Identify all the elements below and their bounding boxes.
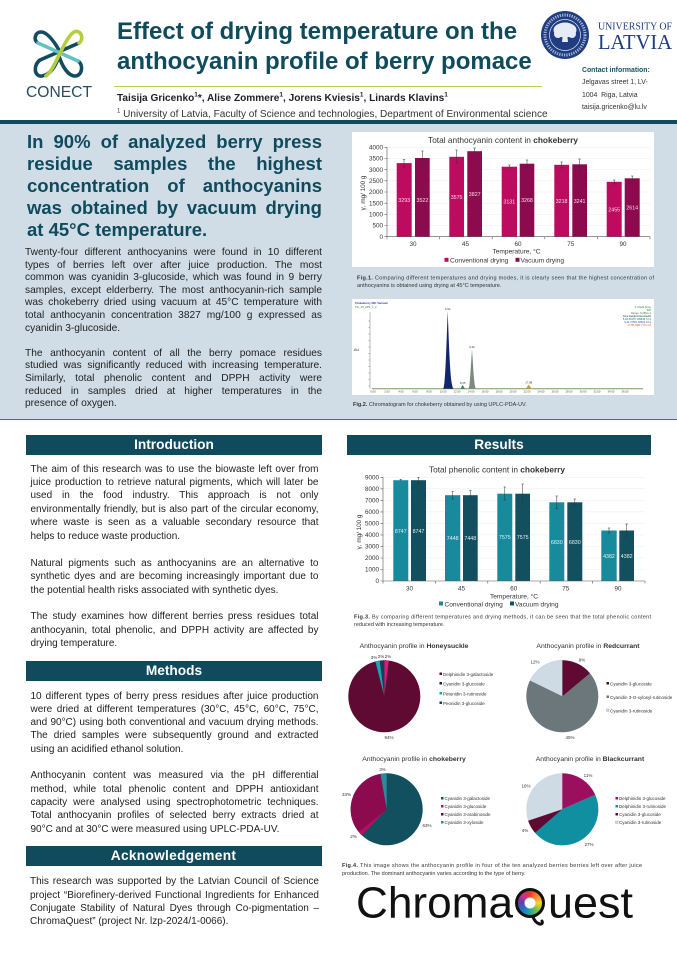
chart: total anthocyanin content: 3131 [503, 200, 515, 206]
introduction text: The aim of this research was to use the biowaste left over from [30, 464, 318, 474]
chart: total anthocyanin content: 2614 [626, 206, 638, 212]
chart: total anthocyanin content: 45 [462, 241, 469, 248]
pie chart: honeysuckle: Cyanidin 3-glucoside [443, 682, 485, 686]
chart: total phenolic content: 90 [614, 586, 622, 592]
pie chart: blackcurrant: 16% [521, 784, 531, 788]
chart: total phenolic content: 8000 [365, 486, 379, 493]
introduction text: Natural pigments such as anthocyanins are an alternative to [30, 558, 318, 569]
chart: chromatogram: 2: Diode Array [635, 305, 652, 309]
methods text: capacity were analysed using spectrophotometric techniques. [30, 797, 318, 808]
pie chart: redcurrant: 12% [530, 660, 540, 664]
headline conclusion: residue samples the highest [27, 152, 322, 174]
chart: total phenolic content: 30 [406, 586, 413, 592]
chart: chromatogram: 32.00 [594, 390, 601, 394]
chart: chromatogram: 24.00 [538, 390, 545, 394]
chart: chromatogram: Range: 6.265e+1 [631, 311, 652, 315]
introduction text: drying temperature. [30, 638, 117, 649]
chart: total anthocyanin content: 30 [409, 241, 417, 248]
chart: chromatogram: 34.00 [608, 390, 615, 394]
pie chart: redcurrant: Cyanidin 3-rutinoside [610, 708, 653, 714]
introduction text: the potential health risks associated with synthetic dyes. [30, 585, 278, 596]
methods text: Total anthocyanin profiles of selected berry extracts dried at [30, 810, 318, 821]
summary text: The anthocyanin content of all the berry pomace residues [25, 348, 322, 359]
chart: total phenolic content: 4382 [621, 554, 633, 560]
logo: University of Latvia [541, 11, 673, 59]
chart: chromatogram: 18.00 [496, 390, 503, 394]
pie chart: chokeberry: Anthocyanin profile in chokeberry [362, 756, 466, 763]
chart: chromatogram: 30.00 [580, 390, 587, 394]
chart: chromatogram: 2.00 [384, 390, 390, 394]
chart: total phenolic content: 9000 [365, 474, 379, 482]
contact information: Jelgavas street 1, LV- [582, 79, 648, 86]
introduction text: The study examines how different berries press residues total [30, 611, 318, 622]
authors: Taisija Gricenko1*, Alise Zommere1, Jorens Kviesis1, Linards Klavins1 [117, 92, 448, 104]
acknowledgement text: Conjugate Stability of Natural Dyes through Co-pigmentation – [30, 903, 319, 914]
chart: total phenolic content: 75 [562, 586, 570, 592]
pie chart: redcurrant: 45% [565, 735, 575, 740]
logo: University of Latvia: LATVIA [598, 30, 673, 54]
pie chart: honeysuckle: Anthocyanin profile in Honeysuckle [360, 643, 469, 650]
chart: chromatogram: AU [354, 347, 359, 352]
chart: total phenolic content: 6000 [365, 509, 379, 516]
chart: total phenolic content: 0 [375, 578, 379, 585]
summary text: presence of oxygen. [25, 398, 117, 409]
chart: total phenolic content: 4382 [603, 554, 615, 560]
chart: total anthocyanin content: 4000 [369, 144, 383, 152]
caption: figure 4: Fig.4. This image shows the anthocyanin profile in four of the ten analyzed berries berries left over after juice [342, 863, 642, 869]
chart: total anthocyanin content: Vacuum drying [520, 258, 564, 265]
chart: total anthocyanin content: 2500 [369, 178, 383, 185]
pie chart: blackcurrant: Cyanidin 3-glucoside [619, 812, 661, 817]
chart: total anthocyanin content: Temperature, °C [492, 248, 541, 256]
headline conclusion [27, 130, 322, 240]
chart: chromatogram: 28.00 [566, 390, 573, 394]
methods text: using an acidified ethanol solution. [30, 744, 183, 755]
summary panel background [0, 120, 677, 420]
introduction text: helps to reduce waste production. [30, 531, 180, 542]
chart: total phenolic content: 45 [458, 586, 465, 592]
pie chart: blackcurrant: Delphinidin 3-glucoside [619, 796, 666, 801]
chart: chromatogram: 22.00 [524, 390, 531, 394]
chart: total phenolic content: 4000 [365, 532, 379, 539]
chart: total phenolic content: 6830 [569, 540, 581, 546]
chart: total anthocyanin content: 3268 [521, 198, 533, 204]
pie chart: honeysuckle: 3% [371, 655, 377, 660]
chart: total anthocyanin content: 2455 [608, 208, 620, 214]
chart: chromatogram: 9.42 27561 66504 24.1 [624, 320, 652, 324]
chart: total anthocyanin content: 1000 [369, 212, 383, 219]
pie chart: redcurrant [526, 643, 673, 740]
pie chart: blackcurrant: Delphinidin 3-rutinoside [619, 804, 667, 809]
pie chart: blackcurrant: 27% [584, 842, 594, 847]
chart: total anthocyanin content: γ, mg/ 100 g [360, 175, 367, 210]
logo: University of Latvia: UNIVERSITY OF [598, 22, 672, 32]
chart: chromatogram: Chokeberry 30C Vacuum [355, 301, 388, 305]
methods text: The dried samples were subsequently ground and extracted [30, 730, 318, 741]
chart: chromatogram: TIC_45_UPS_C_3 [355, 305, 377, 309]
pie chart: chokeberry: Cyanidin 3-arabinoside [444, 812, 491, 817]
chart: total anthocyanin content: 3575 [451, 195, 463, 201]
introduction text: used in the food industry. This approach is not only [30, 490, 318, 501]
chart: total phenolic content: 60 [510, 586, 518, 592]
chart: total anthocyanin content: 3293 [398, 198, 410, 204]
introduction text: environmentally friendly, but is also part of the circular economy, [30, 504, 318, 515]
affiliation: 1 University of Latvia, Faculty of Science and technologies, Department of Environmental science [117, 109, 548, 120]
chart: total anthocyanin content: 3522 [417, 198, 428, 204]
pie chart: redcurrant: Cyanidin 3-O-xylosyl-rutinoside [610, 695, 673, 700]
headline conclusion: at 45°C temperature. [27, 218, 207, 240]
chart: total anthocyanin content: 1500 [369, 200, 383, 207]
acknowledgement text [30, 876, 320, 927]
chart: total anthocyanin content: Total anthocyanin content in chokeberry [428, 135, 578, 145]
chart: total anthocyanin content: 60 [514, 241, 522, 248]
chart: chromatogram: 8.35 [460, 381, 466, 385]
summary text: total anthocyanin concentration 3827 mg/100 g expressed as [25, 310, 322, 321]
introduction text: synthetic dyes and are becoming increasingly important due to [30, 571, 318, 582]
pie chart: blackcurrant [521, 756, 667, 847]
acknowledgement text: ChromaQuest” (project Nr. lzp-2024/1-0066). [30, 916, 228, 927]
chart: total phenolic content [356, 464, 645, 608]
summary text: Twenty-four different anthocyanins were found in 10 different [25, 247, 322, 258]
heading: introduction [26, 435, 322, 455]
pie chart: honeysuckle: 2% [378, 654, 384, 659]
summary text: common was cyanidin 3-glucoside, which was found in 9 berry [25, 272, 322, 283]
methods text: method, while total phenolic content and DPPH antioxidant [30, 784, 318, 795]
chart: total phenolic content: 1000 [365, 567, 379, 574]
caption: figure 4 [342, 863, 642, 877]
caption: figure 3: Fig.3. By comparing different temperatures and drying methods, it can be seen that the total phenolic content [354, 614, 651, 620]
chart: total phenolic content: 7575 [499, 535, 511, 541]
logo: ChromaQuest: Chroma [356, 878, 514, 928]
heading: methods: Methods [146, 663, 202, 678]
chart: chromatogram: 14.00 [468, 390, 475, 394]
chart: chromatogram: 0.00 [370, 390, 376, 394]
summary text: samples, except elderberry. The most anthocyanin-rich sample [25, 285, 322, 296]
chart: total anthocyanin content: 90 [619, 241, 627, 248]
pie chart: redcurrant: Anthocyanin profile in Redcurrant [536, 643, 640, 650]
chart: total anthocyanin content: 3000 [369, 167, 383, 174]
chart: total phenolic content: 8747 [395, 529, 407, 535]
caption: figure 4: production. The dominant anthocyanin varies according to the type of berry. [342, 871, 526, 877]
summary text: cyanidin 3-glucoside. [25, 323, 120, 334]
chart: total phenolic content: 7575 [517, 535, 529, 541]
contact information: taisija.gricenko@lu.lv [582, 104, 647, 111]
methods text: Anthocyanin content was measured via the pH differential [30, 770, 318, 781]
pie chart: honeysuckle: 2% [385, 654, 391, 659]
pie chart: chokeberry: Cyanidin 3-glucoside [444, 804, 487, 809]
logo: ChromaQuest [356, 878, 633, 928]
title: Effect of drying temperature on the [117, 18, 517, 45]
pie chart: chokeberry: 2% [350, 834, 357, 839]
chart: total phenolic content: γ, mg/ 100 g [356, 514, 363, 549]
chart: total anthocyanin content: 3500 [369, 156, 383, 163]
title [117, 18, 532, 74]
chart: total phenolic content: Conventional drying [444, 602, 503, 608]
caption: figure 2: Fig.2. Chromatogram for chokeberry obtained by using UPLC-PDA-UV. [353, 402, 527, 408]
pie chart: chokeberry [342, 756, 491, 845]
logo: ChromaQuest: uest [548, 878, 633, 928]
summary text: was chokeberry dried using vacuum at 45°C temperature with [25, 297, 322, 308]
headline conclusion: was obtained by vacuum drying [27, 196, 322, 218]
pie chart: blackcurrant: 4% [522, 828, 528, 833]
caption: figure 3 [354, 614, 651, 628]
chart: total anthocyanin content: 500 [372, 223, 383, 230]
title: anthocyanin profile of berry pomace [117, 48, 532, 74]
chart: chromatogram: 17.88 [525, 380, 533, 384]
chart: chromatogram: 12.00 [454, 390, 461, 394]
introduction text: anthocyanin, total phenolic, and DPPH activity are affected by [30, 625, 318, 636]
introduction text: juice production to retrieve natural pigments, which will later be [30, 477, 318, 488]
summary text [25, 247, 322, 409]
chart: total anthocyanin content: 3827 [469, 192, 481, 198]
acknowledgement text: This research was supported by the Latvian Council of Science [30, 876, 319, 887]
chart: total anthocyanin content [352, 132, 654, 267]
introduction text [30, 464, 318, 649]
chart: chromatogram: 6.94 [445, 307, 451, 311]
introduction text: where waste is seen as a valuable secondary resource that [30, 517, 318, 528]
icon: ChromaQuest colour wheel [515, 888, 545, 918]
caption: figure 3: reduced with increasing temperature. [354, 622, 445, 628]
pie chart: chokeberry: 63% [422, 823, 432, 828]
title rule [114, 86, 542, 87]
chart: total anthocyanin content: 75 [567, 241, 575, 248]
chart: chromatogram: 26.00 [552, 390, 559, 394]
logo: CONECT: CONECT [26, 84, 93, 101]
headline conclusion: concentration of anthocyanins [27, 174, 322, 196]
chart: chromatogram: 9.42 [469, 345, 475, 349]
pie chart: chokeberry: 33% [342, 792, 351, 797]
summary text: reduced in samples dried at higher temperatures in the [25, 386, 322, 397]
chart: total phenolic content: 6830 [551, 540, 563, 546]
heading: results [347, 435, 651, 455]
chart: chromatogram: Time Height Area Area% [623, 314, 652, 318]
pie chart: honeysuckle: Delphinidin 3-galactoside [443, 672, 494, 677]
pie chart: chokeberry: Cyanidin 3-xyloside [444, 820, 484, 825]
chart: total anthocyanin content: 3241 [574, 199, 586, 205]
caption: figure 1 [357, 276, 654, 289]
chart: chromatogram: 8.00 [426, 390, 432, 394]
chart: total anthocyanin content: 0 [379, 234, 383, 241]
chart: chromatogram: 10.00 [440, 390, 447, 394]
pie chart: blackcurrant: Anthocyanin profile in Blackcurrant [536, 756, 645, 763]
caption: figure 1: anthocyanins is obtained using drying at 45°C temperature. [357, 283, 502, 289]
heading: introduction: Introduction [134, 437, 214, 452]
chart: total anthocyanin content: Conventional drying [450, 258, 509, 265]
contact information [582, 66, 650, 111]
pie chart: blackcurrant: Cyanidin 3-rutinoside [619, 820, 662, 825]
acknowledgement text: project “Biorefinery-derived Functional Ingredients for Enhanced [30, 890, 319, 901]
chart: total phenolic content: Vacuum drying [515, 602, 559, 608]
chart: total phenolic content: 5000 [365, 521, 379, 528]
chart: total phenolic content: 2000 [365, 555, 379, 562]
summary text: types of berries left over after juice production. The most [25, 260, 322, 271]
chart: chromatogram: 36.00 [622, 390, 629, 394]
chart: total phenolic content: Temperature, °C [490, 593, 538, 601]
contact information: Contact information: [582, 66, 650, 74]
chart: total phenolic content: Total phenolic content in chokeberry [429, 464, 565, 474]
heading: acknowledgement: Acknowledgement [111, 848, 236, 863]
chart: total phenolic content: 3000 [365, 544, 379, 551]
chart: total phenolic content: 7000 [365, 498, 379, 504]
pie chart: redcurrant: 9% [579, 658, 585, 662]
chart: chromatogram: 16.00 [482, 390, 489, 394]
chart: chromatogram: 6.94 60470 199819 72.3 [623, 317, 652, 321]
methods text: 10 different types of berry press residues after juice production [30, 691, 318, 702]
heading: acknowledgement [26, 846, 322, 866]
chart: total phenolic content: 7448 [447, 536, 459, 542]
chart: chromatogram: 20.00 [510, 390, 517, 394]
pie chart: honeysuckle: Petunidin 3-rutinoside [443, 692, 487, 696]
pie chart: honeysuckle: Peonidin 3-glucoside [443, 701, 485, 706]
chart: chromatogram [352, 299, 654, 395]
methods text: and 90°C) using both conventional and vacuum drying methods. [30, 717, 318, 728]
heading: methods [26, 661, 322, 681]
methods text [30, 691, 318, 835]
heading: results: Results [474, 437, 524, 452]
pie chart: chokeberry: 3% [379, 767, 386, 772]
chart: chromatogram: 6.00 [412, 390, 418, 394]
chart: total phenolic content: 7448 [464, 536, 476, 542]
chart: total anthocyanin content: 3218 [556, 199, 568, 205]
summary text: Similarly, total phenolic content and DPPH activity were [25, 373, 322, 384]
pie chart: blackcurrant: 11% [584, 773, 592, 778]
pie chart: chokeberry: Cyanidin 3-galactoside [444, 796, 491, 801]
chart: total phenolic content: 8747 [413, 529, 424, 535]
summary text: studied was significantly reduced with increasing temperature. [25, 360, 322, 371]
headline conclusion: In 90% of analyzed berry press [27, 130, 322, 152]
methods text: 90°C and at 30°C were measured using UPLC-PDA-UV. [30, 824, 279, 835]
pie chart: honeysuckle: 94% [384, 735, 394, 740]
methods text: were dried at different temperatures (30°C, 45°C, 60°C, 75°C, [30, 704, 318, 715]
chart: chromatogram: 520 [647, 308, 652, 312]
chart: total anthocyanin content: 2000 [369, 189, 383, 196]
chart: chromatogram: 4.00 [398, 390, 404, 394]
pie chart: redcurrant: Cyanidin 3-glucoside [610, 682, 652, 686]
caption: figure 1: Fig.1. Comparing different temperatures and drying modes, it is clearly seen that the highest concentration of [357, 276, 654, 282]
logo: CONECT [26, 31, 93, 101]
chart: chromatogram: 17.88 1980 7711 2.8 [627, 323, 652, 327]
contact information: 1004 Riga, Latvia [582, 92, 638, 99]
pie chart: honeysuckle [348, 643, 494, 740]
